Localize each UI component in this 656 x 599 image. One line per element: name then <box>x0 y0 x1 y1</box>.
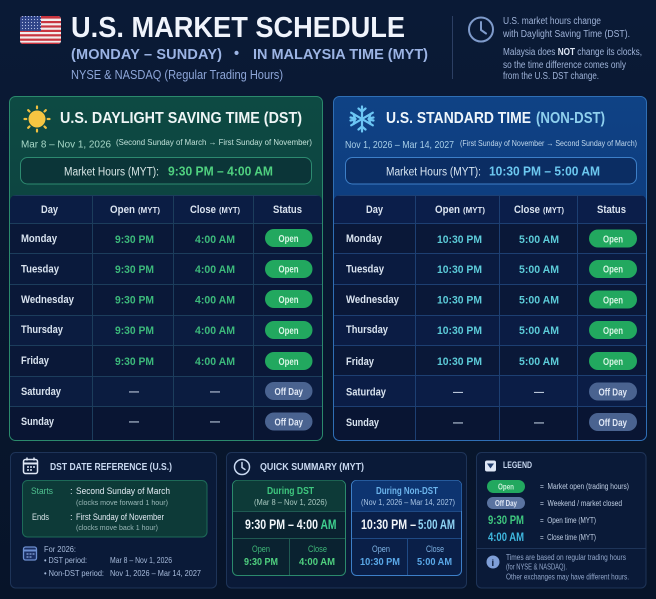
row: Thursday: 9:30 PM <box>115 325 154 337</box>
icon: calendar <box>24 458 38 474</box>
2026 periods: • DST period: <box>44 555 87 565</box>
DST explanation note: with Daylight Saving Time (DST). <box>502 29 630 40</box>
row: Wednesday: 4:00 AM <box>195 294 235 306</box>
row: Tuesday: Tuesday <box>21 264 60 276</box>
card: during DST: AM <box>320 517 336 532</box>
DST start and end rules: Second Sunday of March <box>76 486 170 497</box>
row: Friday <box>21 352 312 370</box>
legend: open: = Market open (trading hours) <box>540 482 629 491</box>
row: Thursday <box>346 321 637 339</box>
row: Wednesday: Wednesday <box>346 294 400 306</box>
DST start and end rules: : <box>70 512 73 523</box>
row: Friday: 10:30 PM <box>437 356 482 368</box>
legend: open time <box>488 513 596 527</box>
legend: off day: Off Day <box>495 499 517 508</box>
card: during DST: Open <box>252 544 270 554</box>
row: Friday <box>346 352 637 370</box>
row: Sunday <box>346 413 637 431</box>
card: during non-DST: During Non-DST <box>376 486 438 497</box>
DST start and end rules: : <box>70 486 73 497</box>
row: Sunday: — <box>534 417 544 429</box>
row: Thursday: Open <box>278 326 298 337</box>
DST start and end rules: Ends <box>32 512 49 523</box>
row: Saturday: — <box>129 386 139 398</box>
legend: off day: = Weekend / market closed <box>540 499 622 508</box>
icon: snowflake <box>350 106 374 132</box>
panel heading: U.S. STANDARD TIME <box>386 110 531 127</box>
panel heading: (NON-DST) <box>536 110 605 127</box>
legend: close time <box>488 530 596 544</box>
date range <box>345 138 637 151</box>
row: Thursday: 5:00 AM <box>519 325 559 337</box>
row: Wednesday: Wednesday <box>21 294 75 306</box>
icon: U.S. flag <box>20 16 61 44</box>
legend: off day <box>487 497 622 509</box>
panel heading: U.S. DAYLIGHT SAVING TIME (DST) <box>60 110 302 127</box>
DST start and end rules: First Sunday of November <box>76 512 164 523</box>
DST explanation note: from the U.S. DST change. <box>503 71 599 82</box>
row: Friday: Open <box>603 357 623 368</box>
market hours bar: Market Hours (MYT): <box>386 166 481 178</box>
2026 periods: Mar 8 – Nov 1, 2026 <box>110 555 172 565</box>
market hours bar: 9:30 PM – 4:00 AM <box>168 164 273 178</box>
row: Saturday: — <box>210 386 220 398</box>
table header: Close <box>190 204 216 216</box>
row: Sunday: Off Day <box>274 418 303 428</box>
row: Wednesday: 5:00 AM <box>519 294 559 306</box>
card: during non-DST: Close <box>426 544 444 554</box>
panel: DST date reference <box>10 452 216 588</box>
row: Thursday <box>21 321 312 339</box>
legend: close time: 4:00 AM <box>488 530 524 544</box>
legend: open <box>487 480 629 493</box>
row: Monday: 4:00 AM <box>195 234 235 246</box>
DST start and end rules: (clocks move back 1 hour) <box>76 523 158 532</box>
row: Saturday <box>346 382 637 400</box>
DST start and end rules: (clocks move forward 1 hour) <box>76 498 168 507</box>
table header: Day <box>41 204 59 216</box>
row: Monday: Open <box>603 234 623 246</box>
row: Saturday: Saturday <box>346 386 387 398</box>
legend note: Other exchanges may have different hours. <box>506 572 629 582</box>
row: Monday: 10:30 PM <box>437 234 482 246</box>
table header: (MYT) <box>543 206 564 215</box>
row: Friday: 4:00 AM <box>195 356 235 368</box>
row: Thursday: 4:00 AM <box>195 325 235 337</box>
row: Friday: Friday <box>346 356 375 368</box>
card: during DST: 9:30 PM – 4:00 <box>245 517 318 532</box>
panel: quick summary <box>226 452 466 588</box>
row: Monday: Monday <box>21 233 58 245</box>
table header: Open <box>110 204 135 216</box>
row: Monday: 5:00 AM <box>519 234 559 246</box>
icon: sun <box>24 106 50 132</box>
row: Sunday: — <box>129 416 139 428</box>
table header: (MYT) <box>138 206 160 215</box>
card: during non-DST: Open <box>372 544 390 554</box>
icon: clock <box>469 18 493 42</box>
row: Friday: 9:30 PM <box>115 356 154 368</box>
row: Wednesday: 9:30 PM <box>115 294 154 306</box>
card: during non-DST: 10:30 PM – <box>361 517 416 532</box>
legend: close time: = Close time (MYT) <box>540 533 596 542</box>
row: Monday <box>346 230 637 248</box>
date range: (Second Sunday of March → First Sunday of November) <box>116 137 312 147</box>
row: Monday <box>21 229 312 247</box>
DST start and end rules <box>22 480 207 537</box>
2026 periods: For 2026: <box>44 544 76 554</box>
row: Monday: 9:30 PM <box>115 234 154 246</box>
row: Tuesday: 9:30 PM <box>115 264 154 276</box>
date range: Mar 8 – Nov 1, 2026 <box>21 138 111 150</box>
row: Saturday: — <box>534 386 544 398</box>
card: during DST: 4:00 AM <box>299 556 335 568</box>
card: during non-DST <box>352 480 462 576</box>
card: during non-DST: (Nov 1, 2026 – Mar 14, 2027) <box>361 498 455 507</box>
row: Saturday: — <box>453 386 463 398</box>
row: Tuesday: Tuesday <box>346 264 385 276</box>
row: Saturday: Off Day <box>274 387 303 398</box>
2026 periods <box>44 544 201 578</box>
2026 periods: Nov 1, 2026 – Mar 14, 2027 <box>110 568 201 578</box>
row: Wednesday: Open <box>603 296 623 306</box>
row: Wednesday: Open <box>278 295 298 306</box>
card: during non-DST: 5:00 AM <box>418 517 455 532</box>
row: Monday: Open <box>278 234 298 245</box>
row: Sunday: — <box>453 417 463 429</box>
table header: Status <box>273 204 302 216</box>
row: Tuesday: 10:30 PM <box>437 264 482 276</box>
row: Tuesday: 5:00 AM <box>519 264 559 276</box>
row: Tuesday <box>346 260 637 278</box>
row: Tuesday <box>21 260 312 278</box>
panel heading: LEGEND <box>503 460 532 471</box>
row: Sunday: Off Day <box>598 418 627 429</box>
2026 periods: • Non-DST period: <box>44 568 104 578</box>
icon: small calendar <box>24 547 36 560</box>
market hours bar <box>20 158 312 184</box>
subtitle: • <box>234 46 239 62</box>
row: Thursday: Thursday <box>346 324 389 336</box>
DST explanation note: U.S. market hours change <box>503 16 601 27</box>
row: Friday: 5:00 AM <box>519 356 559 368</box>
panel heading: DST DATE REFERENCE (U.S.) <box>50 461 172 473</box>
row: Sunday <box>21 412 312 430</box>
Standard time table <box>334 195 646 440</box>
icon: legend badge <box>485 460 496 472</box>
date range <box>21 137 312 150</box>
subtitle: IN MALAYSIA TIME (MYT) <box>253 47 428 63</box>
subtitle: (MONDAY – SUNDAY) <box>71 47 222 63</box>
DST explanation note: so the time difference comes only <box>503 60 626 71</box>
panel: Standard time schedule <box>334 96 646 440</box>
card: during non-DST: 5:00 AM <box>417 556 452 568</box>
icon: clock <box>234 460 250 474</box>
row: Thursday: Thursday <box>21 324 64 336</box>
row: Sunday: Sunday <box>346 417 380 429</box>
row: Tuesday: 4:00 AM <box>195 264 235 276</box>
card: during DST: During DST <box>267 486 314 497</box>
table header: Close <box>514 204 540 216</box>
panel: DST schedule <box>10 96 322 440</box>
row: Friday: Friday <box>21 355 50 367</box>
exchange note: NYSE & NASDAQ (Regular Trading Hours) <box>71 68 283 82</box>
panel: legend <box>476 452 646 588</box>
row: Saturday: Saturday <box>21 386 62 398</box>
table header: (MYT) <box>463 206 485 215</box>
row: Wednesday: 10:30 PM <box>437 294 482 306</box>
legend: open time: = Open time (MYT) <box>540 516 596 525</box>
row: Wednesday <box>346 290 637 308</box>
row: Monday: Monday <box>346 233 383 245</box>
card: during DST: (Mar 8 – Nov 1, 2026) <box>254 498 327 507</box>
DST explanation note <box>502 16 642 82</box>
icon: info <box>486 556 500 569</box>
legend note: (for NYSE & NASDAQ). <box>506 562 567 572</box>
row: Saturday: Off Day <box>598 388 627 398</box>
market hours bar: 10:30 PM – 5:00 AM <box>489 164 600 178</box>
DST start and end rules: Starts <box>31 486 53 497</box>
row: Friday: Open <box>278 357 298 368</box>
DST explanation note: Malaysia does NOT change its clocks, <box>503 47 642 58</box>
legend: open: Open <box>498 482 514 492</box>
panel heading: QUICK SUMMARY (MYT) <box>260 461 364 473</box>
row: Sunday: Sunday <box>21 416 55 428</box>
row: Wednesday <box>21 290 312 308</box>
legend note: Times are based on regular trading hours <box>506 553 626 562</box>
card: during DST <box>232 480 346 576</box>
table header <box>41 204 302 216</box>
card: during non-DST: 10:30 PM <box>360 556 400 568</box>
row: Tuesday: Open <box>278 264 298 276</box>
card: during DST: 9:30 PM <box>244 556 278 568</box>
table header: (MYT) <box>219 206 240 215</box>
table header: Status <box>597 204 626 216</box>
row: Saturday <box>21 382 312 400</box>
card: during DST: Close <box>308 544 327 554</box>
DST table <box>10 195 322 440</box>
table header: Day <box>366 204 384 216</box>
date range: Nov 1, 2026 – Mar 14, 2027 <box>345 139 454 151</box>
table header <box>366 204 626 216</box>
row: Thursday: 10:30 PM <box>437 325 482 337</box>
subtitle <box>71 46 428 63</box>
row: Tuesday: Open <box>603 264 623 276</box>
legend note <box>506 553 629 582</box>
row: Sunday: — <box>210 416 220 428</box>
table header: Open <box>435 204 460 216</box>
title: U.S. MARKET SCHEDULE <box>71 12 405 44</box>
legend: open time: 9:30 PM <box>488 513 524 527</box>
row: Thursday: Open <box>603 326 623 337</box>
icon: info: i <box>492 558 494 569</box>
market hours bar <box>346 158 636 184</box>
market hours bar: Market Hours (MYT): <box>64 166 159 178</box>
